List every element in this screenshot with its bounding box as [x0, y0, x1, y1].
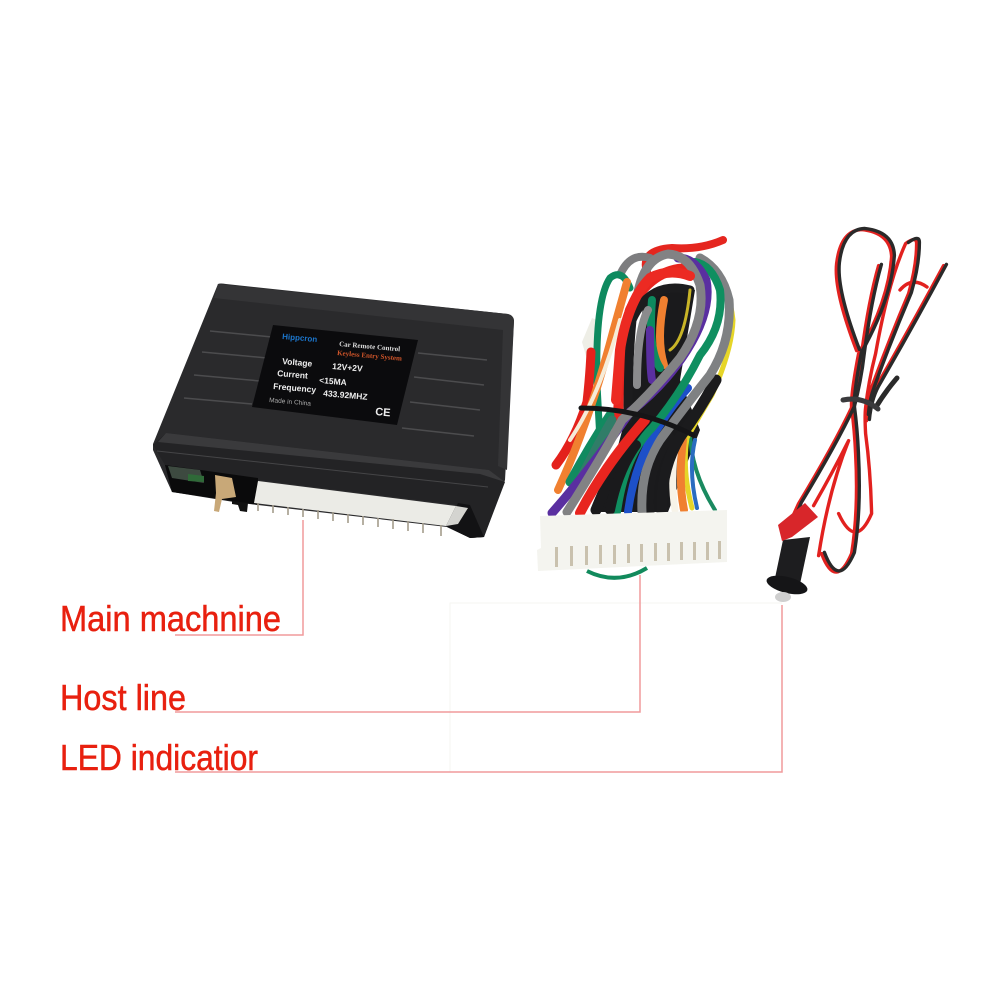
red plug — [778, 503, 818, 541]
main machine control box — [153, 284, 514, 538]
voltage spec name: Voltage — [282, 356, 313, 369]
current spec name: Current — [277, 368, 308, 381]
white wire connector — [537, 510, 727, 571]
product label — [252, 325, 418, 425]
voltage value: 12V+2V — [332, 361, 363, 374]
wire bundle — [552, 240, 733, 513]
box body — [153, 284, 514, 538]
leader line: host line — [175, 575, 640, 712]
LED holder — [765, 537, 810, 602]
red and black twin cable — [789, 228, 946, 572]
front opening with circuit board — [168, 466, 248, 512]
leader line: LED indicator — [175, 605, 782, 772]
frequency spec name: Frequency — [273, 381, 317, 395]
frequency value: 433.92MHZ — [323, 388, 368, 402]
small white rear connector — [582, 318, 602, 356]
origin note: Made in China — [269, 397, 312, 408]
product subtitle: Keyless Entry System — [337, 349, 402, 363]
brand name: Hippcron — [282, 332, 318, 344]
bottom green loop — [587, 568, 647, 578]
LED indicator with red and black cable — [765, 228, 946, 602]
CE mark: CE — [375, 406, 391, 419]
label: host line: Host line — [60, 677, 186, 718]
cable tie — [581, 408, 693, 435]
white socket with pins — [254, 481, 468, 536]
current value: <15MA — [319, 375, 347, 387]
product title: Car Remote Control — [339, 340, 401, 353]
cable tie — [843, 399, 878, 409]
label: main machine: Main machnine — [60, 598, 281, 639]
label: LED indicator: LED indicatior — [60, 737, 258, 778]
leader line: main machine — [175, 520, 303, 635]
host line wiring harness — [537, 240, 733, 578]
